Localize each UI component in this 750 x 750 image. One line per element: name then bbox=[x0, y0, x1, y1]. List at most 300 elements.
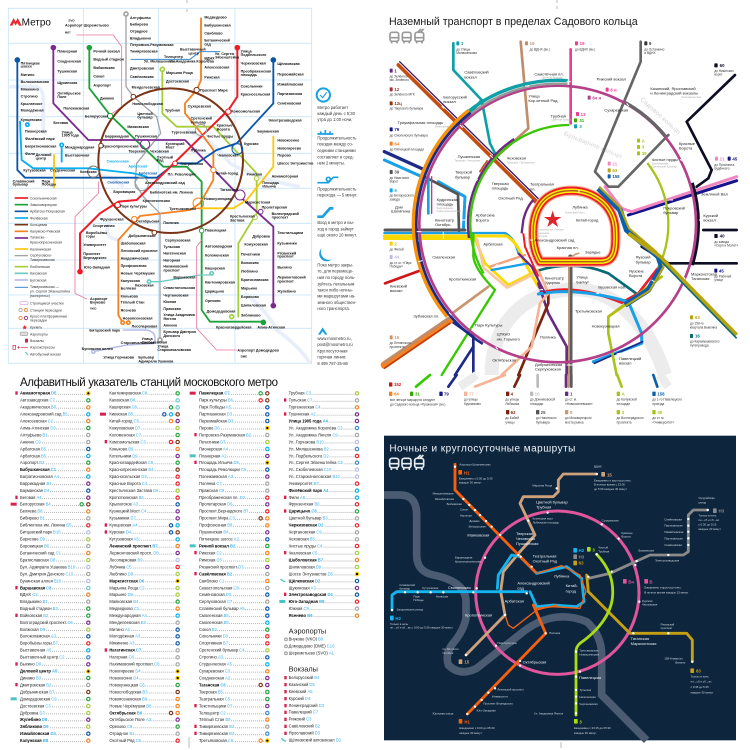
station labels: Курский bbox=[703, 213, 718, 218]
station labels: Бульвар Дмитрия bbox=[163, 330, 196, 334]
index column 4: Тушинская A2 bbox=[289, 412, 316, 417]
labels: Ленинский проспект bbox=[497, 688, 525, 692]
icon: transfer bbox=[317, 177, 338, 183]
labels: Александровский bbox=[517, 580, 550, 585]
station labels: Зарядье bbox=[585, 249, 601, 254]
sidebar: metro info: post@mosmetro.ru bbox=[317, 342, 353, 347]
index column 2: Марьина Роща C2 bbox=[109, 585, 145, 590]
station labels: Домодедовская bbox=[207, 310, 235, 314]
index column 2: Нагатинская C7 bbox=[109, 648, 142, 653]
index column 1: Библиотека им. Ленина B5 bbox=[20, 523, 72, 528]
index column 2: Кантемировская C8 bbox=[109, 391, 148, 396]
station labels: Лесопарковая bbox=[132, 324, 157, 328]
station labels: проспект bbox=[272, 215, 288, 219]
station labels: Маяковская bbox=[435, 124, 450, 128]
labels: Ежедневно с 23:15 до 05:30 bbox=[574, 726, 611, 730]
station labels: Киевский bbox=[390, 283, 407, 288]
route number tags: 64 bbox=[394, 141, 400, 146]
labels: бульвар bbox=[399, 586, 410, 590]
stations list: Белорусский B4 bbox=[289, 675, 320, 680]
route number tags: до Карамышевского bbox=[690, 340, 720, 344]
index column 4: Электрозаводская D4 bbox=[289, 592, 333, 597]
index column 1: Волоколамская A3 bbox=[20, 634, 57, 639]
station labels: вокзал bbox=[464, 74, 477, 79]
index column 2: Маяковская B4 bbox=[109, 599, 139, 604]
station labels: Севастопольская bbox=[163, 286, 195, 290]
station labels: Автозаводская bbox=[205, 244, 232, 248]
stations list: Киевский A5 bbox=[289, 689, 313, 694]
labels: Победы bbox=[413, 598, 424, 602]
station labels: Преображенская bbox=[241, 70, 271, 74]
sidebar: metro info: 8 499 787-25-86 bbox=[317, 361, 349, 366]
route number tags: до Рабочей bbox=[714, 274, 731, 278]
index column 2: Котельники D9 bbox=[109, 453, 138, 458]
route tags: «Новоясеневская» bbox=[565, 402, 593, 406]
index column 1: Бибирево B1 bbox=[20, 516, 46, 521]
index column 1: Битцевский парк B10 bbox=[20, 530, 61, 535]
labels: проспект bbox=[661, 626, 673, 630]
index column 1: Арбатская B5 bbox=[20, 453, 47, 458]
index column 1: Боровицкая B6 bbox=[20, 543, 50, 548]
route number tags: проспекта bbox=[390, 345, 405, 349]
route number tags: 19 bbox=[580, 41, 585, 46]
labels: Трубная bbox=[598, 549, 610, 553]
index column 1: Дмитровская B2 bbox=[20, 682, 52, 687]
index column 3: Тверская B5 bbox=[199, 689, 223, 694]
labels: Юрловая улица bbox=[433, 711, 454, 715]
sidebar: metro info: каждый день с 5:30 bbox=[317, 111, 356, 116]
index column 3: Спортивная B7 bbox=[199, 641, 229, 646]
route number tags: 15 bbox=[530, 41, 535, 46]
sidebar: metro info: Метро работает bbox=[317, 105, 348, 110]
index column 1: Варшавская C8 bbox=[20, 585, 52, 590]
station labels: Донского bbox=[163, 334, 181, 338]
station labels: проспект bbox=[277, 255, 294, 259]
station labels: Кропоткинская bbox=[449, 276, 476, 281]
labels: Кропоткинская bbox=[465, 613, 492, 618]
station labels: Красные bbox=[679, 141, 696, 146]
index column 2: Кутузовская A5 bbox=[109, 537, 139, 542]
index column 1: Баррикадная B4 bbox=[20, 481, 52, 486]
labels: Чертановская bbox=[579, 702, 598, 706]
sidebar: metro info: ния по городу поль- bbox=[317, 275, 356, 280]
index column 3: Славянский бульвар A5 bbox=[199, 606, 245, 611]
index column 3: Профсоюзная B8 bbox=[199, 523, 233, 528]
labels: Измайловская bbox=[664, 530, 684, 534]
route tags: до 1-го Павелецкого bbox=[652, 398, 682, 402]
station labels: Деловой bbox=[36, 153, 52, 157]
index column 1: Выставочная A5 bbox=[20, 648, 52, 653]
station labels: Триумфальная площадь bbox=[398, 120, 443, 125]
legend: пересадки bbox=[30, 319, 47, 323]
labels: Парк bbox=[413, 595, 421, 599]
station labels: Митино bbox=[21, 73, 35, 77]
labels: Бч bbox=[628, 579, 634, 584]
station labels: сад bbox=[204, 43, 211, 47]
station labels: Шаляпина bbox=[391, 209, 411, 214]
route number tags: Будённого bbox=[714, 167, 730, 171]
index column 1: Беговая A4 bbox=[20, 495, 42, 500]
route number tags: 9 bbox=[649, 41, 652, 46]
labels: каждые 30 минут bbox=[698, 527, 722, 531]
index column 1: Владыкино B1 bbox=[20, 599, 48, 604]
route number tags: до завода bbox=[714, 240, 729, 244]
station labels: Эйзенштейна bbox=[215, 55, 240, 59]
labels: Электрозаводская bbox=[655, 559, 680, 563]
labels: Только в ночь bbox=[691, 675, 709, 679]
route number tags: до ВДНХ (вн.) bbox=[530, 47, 550, 51]
station labels: Красная пл. bbox=[557, 245, 579, 250]
index column 1: Авиамоторная D5 bbox=[20, 391, 57, 396]
station labels: Чкаловская bbox=[217, 154, 238, 158]
station labels: Вузовская наб. bbox=[598, 285, 626, 290]
route tags: до ст. м. bbox=[565, 398, 577, 402]
index column 1: Выставочный центр C2 bbox=[20, 655, 65, 660]
station labels: Тимирязевская bbox=[130, 50, 158, 54]
labels: сад bbox=[517, 585, 525, 590]
route number tags: Милашенкова bbox=[456, 51, 477, 55]
station labels: Кузьминки bbox=[277, 241, 297, 245]
index column 1: ВДНХ C2 bbox=[20, 592, 38, 597]
index column 1: Водный стадион B2 bbox=[20, 606, 58, 611]
station labels: Отрадное bbox=[130, 29, 148, 33]
station labels: Римская bbox=[247, 173, 262, 177]
station labels: Третьяковская bbox=[575, 308, 602, 313]
index column 3: Площадь Ильича D5 bbox=[199, 460, 240, 465]
station labels: проспект bbox=[277, 279, 294, 283]
sidebar: metro info: то, для перемеще- bbox=[317, 269, 354, 274]
labels: Только в ночь bbox=[390, 622, 409, 626]
station labels: Проспект Мира bbox=[200, 89, 228, 93]
sidebar: metro info: составляет в сред- bbox=[317, 154, 354, 159]
sidebar: metro info: ещё около 10 минут. bbox=[317, 233, 357, 238]
panel: surface transport legend bottom bbox=[389, 375, 682, 424]
route number tags: 3 bbox=[642, 145, 645, 150]
station labels: Тверская, Чеховская bbox=[454, 158, 480, 162]
index column 2: Марьино D8 bbox=[109, 592, 134, 597]
index column 2: Курская D4 bbox=[109, 530, 132, 535]
station labels: Черкизовская bbox=[241, 61, 266, 65]
route tags: 64 bbox=[394, 392, 399, 397]
index column 3: Площадь Революции C5 bbox=[199, 467, 247, 472]
index column 3: Печатники D7 bbox=[199, 439, 226, 444]
icon: metro logo bbox=[10, 18, 22, 26]
index column 1: Бабушкинская C1 bbox=[20, 467, 57, 472]
legend: ул. Сергея Эйзенштейна bbox=[30, 290, 70, 294]
route number tags: 3 bbox=[579, 124, 582, 129]
index column 2: Кузнецкий Мост C4 bbox=[109, 509, 147, 514]
station labels: Покровский bbox=[663, 205, 685, 210]
index column 2: Медведково C1 bbox=[109, 606, 140, 611]
index column 3: Перово D6 bbox=[199, 425, 220, 430]
index column 2: Охотный Ряд C5 bbox=[109, 738, 142, 743]
labels: Юго-Западная bbox=[477, 709, 496, 713]
station labels: Полежаевская bbox=[63, 106, 89, 110]
route number tags: до ВДНХ (вн.) bbox=[575, 47, 595, 51]
route number tags: до Тверского бульвара bbox=[390, 107, 423, 111]
index column 1 bbox=[11, 390, 90, 744]
index column 3: Телецентр C2 bbox=[199, 710, 226, 715]
station labels: Маяковская bbox=[127, 125, 149, 129]
station labels bbox=[390, 70, 728, 372]
station labels: Щёлковская bbox=[277, 62, 300, 66]
route number tags: 39 bbox=[642, 151, 647, 156]
index column 2: Новокосино D4 bbox=[109, 675, 139, 680]
station labels: Выставочная bbox=[65, 154, 89, 158]
station labels: Коньково bbox=[121, 294, 139, 298]
index column 2: Мякинино A3 bbox=[109, 641, 135, 646]
route number tags: 16 bbox=[695, 334, 700, 339]
station labels: Алма-Атинская bbox=[257, 325, 285, 329]
labels: Киевская bbox=[436, 595, 449, 599]
icon: kremlin star bbox=[544, 211, 561, 227]
labels: Краснопресненская bbox=[455, 559, 481, 563]
station labels: Александровский сад bbox=[534, 238, 575, 243]
station labels: Полянка bbox=[163, 221, 180, 225]
station labels: Трубная bbox=[165, 109, 180, 113]
station labels: Южная bbox=[163, 300, 176, 304]
sidebar: metro info: поездки между со- bbox=[317, 142, 354, 147]
station labels: Добрынинская bbox=[535, 362, 562, 367]
index column 4: Чеховская B5 bbox=[289, 537, 315, 542]
station labels: бульвар bbox=[663, 210, 679, 215]
station labels: Алтуфьево bbox=[130, 16, 152, 20]
route tags: бульвара bbox=[536, 420, 550, 424]
index column 4: Филёвский парк A4 bbox=[289, 488, 329, 493]
panel: metro map bbox=[8, 8, 358, 366]
sidebar: metro info: зуйтесь легальным bbox=[317, 281, 355, 286]
route number tags: 12ц bbox=[394, 101, 402, 106]
station labels: Дубровка bbox=[252, 234, 271, 238]
ring labels: Садовое кольцо bbox=[639, 96, 682, 136]
station labels: Парк bbox=[42, 179, 51, 183]
labels: Н3 bbox=[719, 508, 725, 513]
route number tags: путепровода bbox=[690, 344, 709, 348]
index column 2: Китай-город C5 bbox=[109, 418, 140, 423]
labels: 63 bbox=[579, 561, 584, 566]
index column 2: Каховская B8 bbox=[109, 398, 136, 403]
station labels: Застава bbox=[230, 218, 245, 222]
route tags: до Донниковской bbox=[530, 398, 555, 402]
station labels: Марьина Роща bbox=[166, 71, 194, 75]
route number tags: 12 bbox=[394, 87, 400, 92]
legend: Вокзалы bbox=[30, 339, 44, 343]
route number tags: квартала Вывхина bbox=[690, 325, 717, 329]
station labels: Коломенская bbox=[205, 254, 229, 258]
dark background bbox=[384, 436, 736, 740]
station labels: Выставочный bbox=[180, 48, 206, 52]
index column 2: Комсомольская C3 bbox=[109, 439, 146, 444]
index column 3: Севастопольская C8 bbox=[199, 585, 240, 590]
labels: Красные bbox=[621, 531, 633, 535]
station labels: Внуково bbox=[90, 301, 106, 305]
index column 3: Проспект Вернадского B7 bbox=[199, 509, 249, 514]
index column 3: Тимирязевская B2 bbox=[199, 731, 235, 736]
station labels: Скобелевская bbox=[142, 341, 167, 345]
labels: Н2 bbox=[579, 548, 585, 553]
index column 1: Динамо B3 bbox=[20, 675, 42, 680]
labels: Кутузовская bbox=[422, 586, 439, 590]
station labels: вокзал bbox=[703, 218, 716, 223]
index column 3: Тёплый Стан B9 bbox=[199, 717, 231, 722]
station labels: Чеховская bbox=[507, 156, 526, 161]
labels: Ворота bbox=[621, 535, 631, 539]
station labels: Щукинская bbox=[57, 81, 77, 85]
route tags: проспекта bbox=[617, 420, 632, 424]
index column 3: Пражская C9 bbox=[199, 488, 225, 493]
station labels: Пражская bbox=[163, 307, 181, 311]
route number tags: 15 bbox=[394, 335, 400, 340]
index column 4: Юго-Западная B8 bbox=[289, 599, 325, 604]
index column 3: Парк культуры B6 bbox=[199, 398, 234, 403]
station labels: Аэропорт Домодедово bbox=[237, 348, 280, 352]
station labels: Ворота bbox=[679, 146, 693, 151]
index column 1: Алтуфьево B1 bbox=[20, 432, 48, 437]
index column 4: Щёлковская D2 bbox=[289, 578, 321, 583]
station labels: Новогиреево bbox=[277, 146, 302, 150]
station labels: Лубянка bbox=[191, 149, 207, 153]
route number tags: 31 bbox=[579, 118, 585, 123]
station labels: проспект bbox=[163, 268, 180, 272]
sidebar: metro info: Вход в метро и вы- bbox=[317, 220, 355, 225]
station labels: Речной вокзал bbox=[93, 49, 121, 53]
ring routes bbox=[355, 21, 750, 427]
index column 1: Борисово D9 bbox=[20, 537, 46, 542]
index column 3: Полежаевская A3 bbox=[199, 474, 234, 479]
icon: escalator bbox=[317, 208, 333, 217]
index column 3: Пионерская A4 bbox=[199, 446, 229, 451]
index column 3: Партизанская D3 bbox=[199, 412, 233, 417]
station labels: Волжская bbox=[241, 261, 259, 265]
station labels: Старокачаловская bbox=[157, 348, 191, 352]
index column 3: Третьяковская C6 bbox=[199, 738, 234, 743]
station labels: Охотный bbox=[157, 155, 173, 159]
route number tags: 63 bbox=[695, 315, 700, 320]
station labels: Сретенский bbox=[191, 117, 212, 121]
panel: night routes bbox=[384, 436, 736, 740]
station labels: Марьино bbox=[241, 286, 258, 290]
route number tags: до Зелёного bbox=[390, 74, 408, 78]
index column 4: Ул. Академика Янгеля C9 bbox=[289, 432, 338, 437]
labels: Китай- bbox=[566, 583, 578, 588]
route number tags: до Ленинского bbox=[390, 341, 411, 345]
index column 1: Калужская B8 bbox=[20, 738, 49, 743]
station labels: Парк культуры bbox=[120, 205, 147, 209]
station labels: Тверская, Пушкинская bbox=[507, 160, 535, 164]
labels: Семёновская bbox=[664, 543, 682, 547]
route number tags: улице bbox=[714, 278, 723, 282]
labels: Ежедневно и круглосуточно. bbox=[594, 479, 631, 483]
station labels: Каширская bbox=[205, 266, 225, 270]
index column 1: Зябликово D9 bbox=[20, 724, 49, 729]
labels: Марьина Роща bbox=[532, 484, 553, 488]
airports list bbox=[285, 627, 335, 656]
station labels: бульвар bbox=[636, 259, 651, 264]
labels: Бауманская bbox=[638, 549, 654, 553]
index column 4: Улица 1905 года A4 bbox=[289, 418, 329, 423]
route number tags: 3 bbox=[461, 41, 464, 46]
route tags: моста рынка bbox=[565, 420, 584, 424]
station labels: Улица bbox=[241, 50, 253, 54]
station labels: и Ленинградский вокзалы bbox=[650, 91, 698, 96]
index column 1: Войковская B2 bbox=[20, 613, 49, 618]
labels: 158-й квартал bbox=[664, 656, 683, 660]
station labels: Самотёчная пл. bbox=[534, 71, 564, 76]
station labels: Пролетарская bbox=[262, 205, 287, 209]
labels: Ежедневно с 0:00 до 05:30 bbox=[459, 726, 495, 730]
station labels: Кор.сетный Ряд bbox=[528, 98, 558, 103]
index column 3: Театральная C5 bbox=[199, 696, 231, 701]
sidebar: metro info: ми маршрутами на- bbox=[317, 294, 356, 299]
legend: Аэропорты bbox=[30, 332, 48, 336]
station labels: Мякинино bbox=[21, 87, 40, 91]
index column 1: Достоевская C3 bbox=[20, 703, 51, 708]
inner ring bbox=[518, 187, 737, 338]
index column 2: Кунцевская A4 bbox=[109, 523, 138, 528]
index column 4: Фили A5 bbox=[289, 495, 306, 500]
labels: Павелецкая bbox=[579, 675, 601, 680]
station labels: Ильича bbox=[262, 185, 277, 189]
station labels: Беговая bbox=[53, 121, 68, 125]
legend: Каховская bbox=[30, 272, 47, 276]
station labels: Казанский, Ярославский bbox=[650, 86, 696, 91]
labels: Баррикадная bbox=[455, 556, 473, 560]
index column 1: Домодедовская C9 bbox=[20, 696, 57, 701]
station labels: центр bbox=[188, 51, 200, 55]
route number tags: 79 bbox=[394, 127, 400, 132]
labels: Марксистская bbox=[631, 641, 656, 646]
station labels: Кунцевская bbox=[21, 118, 42, 122]
route number tags: 21 bbox=[720, 156, 725, 161]
station labels: Цветной бульвар bbox=[552, 118, 573, 122]
index column 1: Воробьёвы горы B7 bbox=[20, 641, 59, 646]
panel heading: Ночные и круглосуточные маршруты bbox=[389, 444, 575, 455]
index column 4: Черкизовская D2 bbox=[289, 523, 324, 528]
route tags: 39 bbox=[657, 410, 663, 415]
route ends bbox=[416, 375, 657, 387]
station labels: Арбатская bbox=[483, 242, 503, 247]
index column 2: Крестьянская Застава D6 bbox=[109, 488, 159, 493]
station labels: Улица bbox=[157, 344, 169, 348]
station labels: Свиблово bbox=[204, 31, 223, 35]
station ticks bbox=[417, 82, 704, 365]
station labels: Филёвский парк bbox=[25, 137, 55, 141]
route tags: 152 bbox=[394, 382, 402, 387]
index column 1: Братиславская D8 bbox=[20, 557, 56, 562]
stops bbox=[392, 467, 708, 714]
route tags: до Москворецкого bbox=[565, 416, 592, 420]
station labels: Братиславская bbox=[241, 278, 269, 282]
sidebar: metro info: ход в город займут bbox=[317, 226, 354, 231]
station labels: Красногвардейская bbox=[216, 325, 252, 329]
station labels: Марксистская bbox=[245, 200, 270, 204]
route number tags: и ВДНХ bbox=[644, 51, 656, 55]
index column 1: Деловой центр A5 bbox=[20, 669, 58, 674]
labels: Арбатская bbox=[505, 598, 524, 603]
route number tags: до Никитских bbox=[390, 176, 409, 180]
index column 1: Бул. Адмирала Ушакова B10 bbox=[20, 564, 76, 569]
station labels: Новокузнецкая bbox=[592, 323, 620, 328]
index column 2: Лубянка C5 bbox=[109, 564, 132, 569]
labels: 15 bbox=[464, 660, 470, 665]
station labels: Зябликово bbox=[241, 314, 261, 318]
index column 2: Краснопресненская B4 bbox=[109, 467, 154, 472]
labels: 63 bbox=[696, 668, 701, 673]
station labels: Университет bbox=[83, 243, 106, 247]
station labels bbox=[13, 15, 314, 363]
station labels: Комсомольская bbox=[682, 95, 702, 99]
station labels: Арбатские bbox=[476, 213, 496, 218]
